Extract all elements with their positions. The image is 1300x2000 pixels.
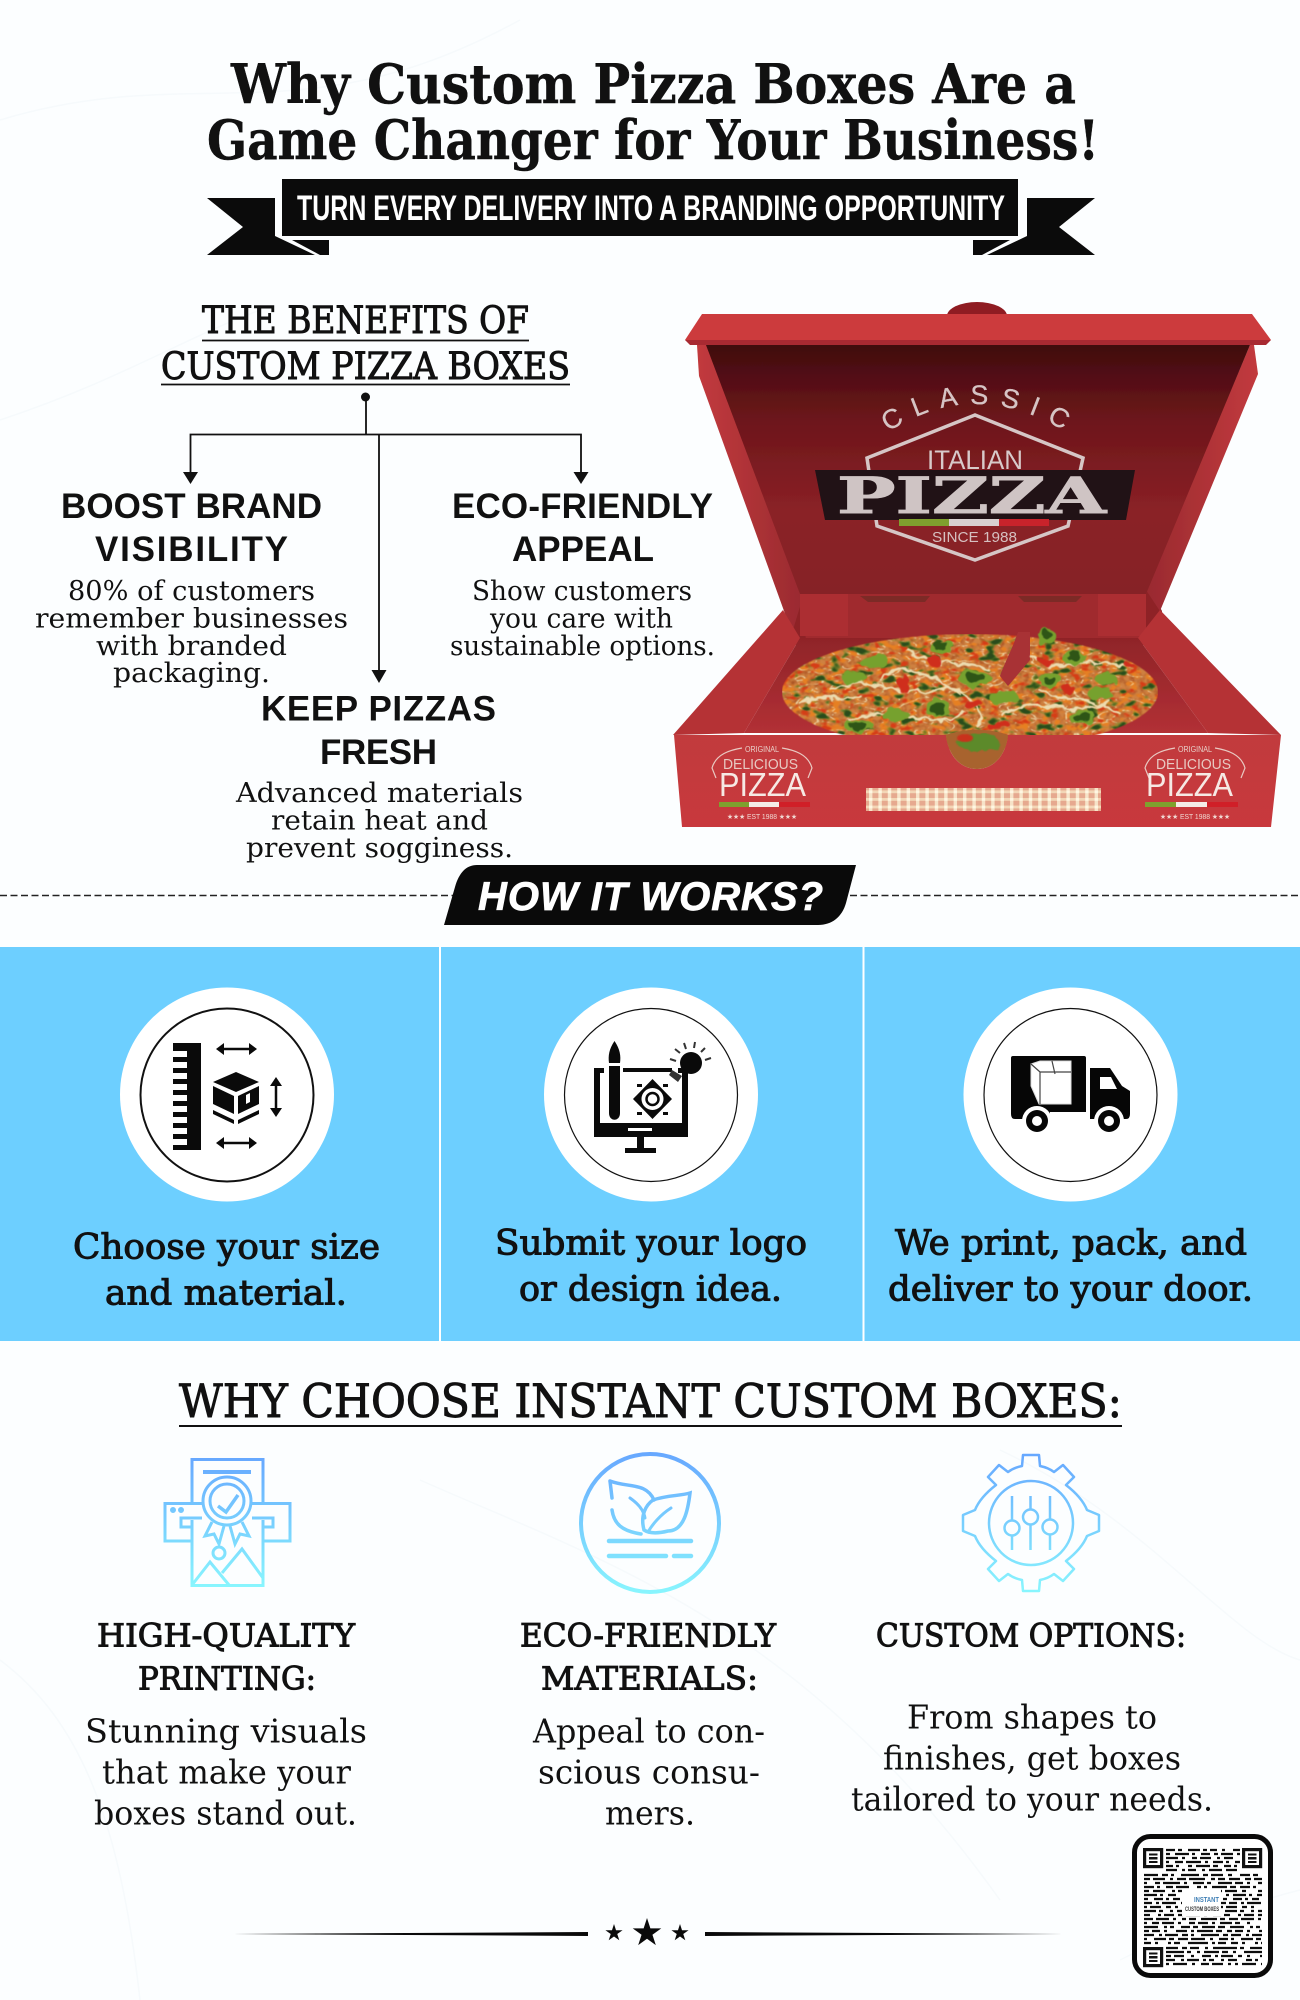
benefit: eco-friendly appeal: Show customers (472, 576, 692, 607)
step 3 text: deliver to your door. (888, 1270, 1253, 1310)
front label left (712, 745, 812, 821)
QR code: CUSTOM BOXES (1185, 1906, 1219, 1913)
icon: gear with sliders (960, 1452, 1102, 1594)
how it works badge: HOW IT WORKS? (478, 875, 823, 919)
gingham strip (866, 788, 1101, 811)
lid logo (815, 385, 1135, 562)
heading: the benefits: CUSTOM PIZZA BOXES (161, 345, 570, 388)
benefit: keep pizzas fresh: Advanced materials (235, 778, 523, 809)
title: Why Custom Pizza Boxes Are a (230, 52, 1076, 116)
benefit: boost brand visibility: VISIBILITY (95, 530, 288, 569)
feature: eco-friendly materials: scious consu- (538, 1752, 760, 1792)
icon: ruler, box and arrows (173, 1043, 282, 1150)
lid tab (947, 302, 1007, 330)
step 1: choose size (73, 988, 380, 1314)
subtitle ribbon banner (207, 179, 1095, 255)
front label right: ORIGINAL (1178, 745, 1212, 754)
feature: high-quality printing: Stunning visuals (85, 1712, 367, 1750)
benefit: boost brand visibility: with branded (96, 631, 287, 662)
front label left: ★★★ EST 1988 ★★★ (727, 813, 797, 821)
benefit: boost brand visibility: packaging. (113, 658, 270, 689)
feature: custom options: CUSTOM OPTIONS: (876, 1616, 1186, 1654)
QR code (1134, 1836, 1270, 1976)
feature: eco-friendly materials: Appeal to con- (532, 1712, 765, 1750)
benefit: keep pizzas fresh: retain heat and (271, 806, 488, 836)
box front wall (674, 735, 1281, 827)
benefit: keep pizzas fresh: prevent sogginess. (246, 833, 513, 864)
benefit: keep pizzas fresh: FRESH (320, 733, 437, 772)
pizza (782, 628, 1158, 750)
icon: monitor, brush and bulb (594, 1041, 711, 1153)
benefit: eco-friendly appeal (450, 487, 715, 662)
lid logo: PIZZA (837, 466, 1108, 525)
heading: the benefits: THE BENEFITS OF (202, 299, 529, 342)
step 2 text: or design idea. (519, 1270, 782, 1310)
benefit: boost brand visibility: 80% of customers (68, 576, 315, 607)
step 1 text (73, 1228, 380, 1314)
front label right: DELICIOUS (1156, 756, 1231, 773)
feature: eco-friendly materials: mers. (605, 1794, 695, 1832)
feature: custom options: finishes, get boxes (883, 1738, 1181, 1778)
feature: custom options: From shapes to (907, 1698, 1157, 1736)
lid logo: CLASSIC (882, 385, 1070, 428)
benefit: eco-friendly appeal: APPEAL (512, 530, 654, 569)
lid logo: SINCE 1988 (932, 529, 1017, 546)
step 3 text: We print, pack, and (895, 1224, 1247, 1264)
feature: custom options: tailored to your needs. (851, 1780, 1213, 1818)
benefit: eco-friendly appeal: sustainable options. (450, 631, 715, 662)
front label right (1145, 745, 1245, 821)
feature: custom options (851, 1616, 1213, 1818)
lid logo: ITALIAN (927, 445, 1023, 475)
benefits connector arrows (183, 392, 588, 683)
step 1 text: Choose your size (73, 1228, 380, 1268)
benefit: eco-friendly appeal: you care with (489, 604, 673, 634)
benefit: keep pizzas fresh (235, 690, 523, 864)
feature: high-quality printing: HIGH-QUALITY (97, 1616, 356, 1654)
feature: eco-friendly materials (520, 1616, 777, 1832)
title: Game Changer for Your Business! (207, 108, 1099, 172)
step 2 text: Submit your logo (495, 1224, 807, 1264)
benefit: boost brand visibility: remember businesses (35, 604, 348, 634)
front label left: DELICIOUS (723, 756, 798, 773)
front label right: ★★★ EST 1988 ★★★ (1160, 813, 1230, 821)
feature: high-quality printing (85, 1616, 367, 1832)
step 2 text (495, 1224, 807, 1310)
icon: quality certificate (160, 1455, 294, 1589)
heading: why choose: WHY CHOOSE INSTANT CUSTOM BOXES: (179, 1374, 1122, 1428)
benefit: eco-friendly appeal: ECO-FRIENDLY (452, 487, 713, 526)
panel: how it works steps (0, 947, 1300, 1341)
feature: high-quality printing: that make your (102, 1752, 351, 1792)
front label right: PIZZA (1146, 766, 1233, 803)
heading: the benefits (161, 299, 570, 388)
QR code: INSTANT (1194, 1897, 1220, 1904)
footer divider with stars (233, 1918, 1063, 1945)
step 1 text: and material. (105, 1274, 347, 1314)
illustration: open pizza box (673, 302, 1281, 827)
front label left: ORIGINAL (745, 745, 779, 754)
front label left: PIZZA (719, 766, 806, 803)
step 3: delivery (888, 988, 1253, 1310)
how it works badge (444, 865, 856, 925)
feature: eco-friendly materials: ECO-FRIENDLY (520, 1616, 777, 1654)
benefit: boost brand visibility (35, 487, 348, 689)
icon: delivery truck (1011, 1056, 1130, 1136)
title (207, 52, 1099, 172)
benefit: boost brand visibility: BOOST BRAND (61, 487, 322, 526)
feature: high-quality printing: PRINTING: (138, 1660, 316, 1698)
icon: leaf circle (578, 1450, 722, 1596)
feature: eco-friendly materials: MATERIALS: (541, 1660, 758, 1698)
step 2: submit design (495, 988, 807, 1310)
step 3 text (888, 1224, 1253, 1310)
benefit: keep pizzas fresh: KEEP PIZZAS (261, 690, 496, 728)
subtitle ribbon banner: TURN EVERY DELIVERY INTO A BRANDING OPPORTUNITY (297, 189, 1005, 228)
feature: high-quality printing: boxes stand out. (94, 1794, 357, 1832)
